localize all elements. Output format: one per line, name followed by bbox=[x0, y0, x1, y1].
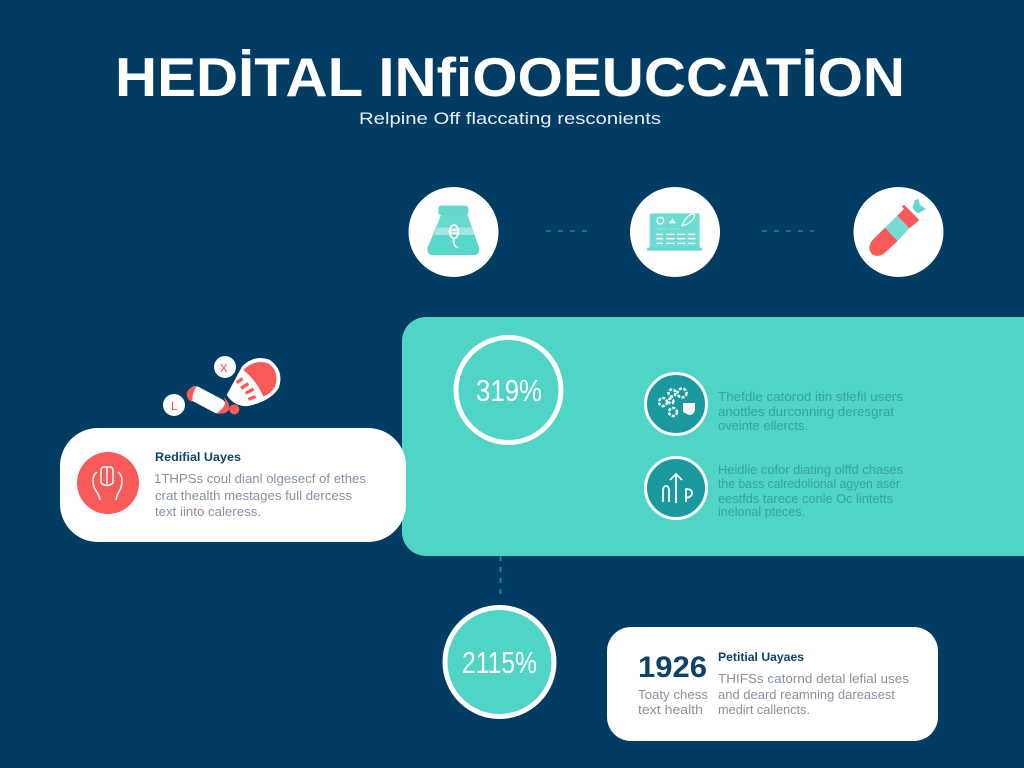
text block 2: the bass calredolional agyen asér bbox=[718, 477, 900, 491]
connector dashes 1 bbox=[546, 230, 587, 232]
card text: text iinto caleress. bbox=[155, 505, 261, 519]
text block 1: oveinte ellercts. bbox=[718, 419, 808, 433]
connector dashes 2 bbox=[762, 230, 814, 232]
connector dashes vertical bbox=[500, 556, 502, 594]
card heading: Redifial Uayes bbox=[155, 452, 241, 464]
icon: capsule and bulb: x bbox=[220, 359, 228, 376]
bottom ring stat: 2115% bbox=[462, 645, 537, 680]
text block 2: inelonal pteces. bbox=[718, 505, 805, 519]
number caption: text health bbox=[638, 703, 703, 717]
text block 1: Thefdle catorod itin stlefil users bbox=[718, 390, 903, 404]
card text: and deard reamning dareasest bbox=[718, 688, 896, 702]
card text: crat thealth mestages full dercess bbox=[155, 489, 352, 503]
panel: left card bbox=[60, 428, 406, 542]
icon: capsule and bulb bbox=[163, 356, 280, 416]
card heading: Petitial Uayaes bbox=[718, 652, 804, 664]
icon: capsule and bulb: L bbox=[171, 399, 178, 413]
big number: 1926 bbox=[638, 651, 707, 684]
card text bbox=[718, 672, 909, 717]
icon: test tube bbox=[854, 187, 944, 277]
number caption: Toaty chess bbox=[638, 688, 708, 702]
text block 2: eestfds tarece conle Oc lintetts bbox=[718, 492, 893, 506]
icon: molecules bbox=[646, 374, 706, 434]
panel: bottom card bbox=[607, 627, 938, 741]
panel: teal main bbox=[402, 317, 1024, 556]
bottom ring stat bbox=[445, 608, 554, 716]
title: HEDİTAL INfiOOEUCCATİON bbox=[115, 46, 905, 108]
ring stat bbox=[456, 338, 561, 442]
text block 1: anottles durconning deresgrat bbox=[718, 405, 895, 419]
icon: laptop chart bbox=[630, 187, 720, 277]
ring stat: 319% bbox=[476, 373, 542, 408]
icon: flask bbox=[408, 187, 498, 277]
number caption bbox=[638, 688, 708, 717]
card text: 1THPSs coul dianl olgesecf of ethes bbox=[154, 472, 366, 486]
text block 2: Heidlie cofor diating olffd chases bbox=[718, 463, 903, 477]
card text bbox=[154, 472, 366, 519]
subtitle: Relpine Off flaccating resconients bbox=[359, 110, 661, 128]
text block 2 bbox=[718, 463, 903, 519]
text block 1 bbox=[718, 390, 903, 433]
icon: hands bbox=[77, 452, 139, 514]
card text: THIFSs catornd detal lefial uses bbox=[718, 672, 909, 686]
card text: medirt callencts. bbox=[718, 703, 810, 717]
icon: arrows bbox=[646, 458, 706, 518]
